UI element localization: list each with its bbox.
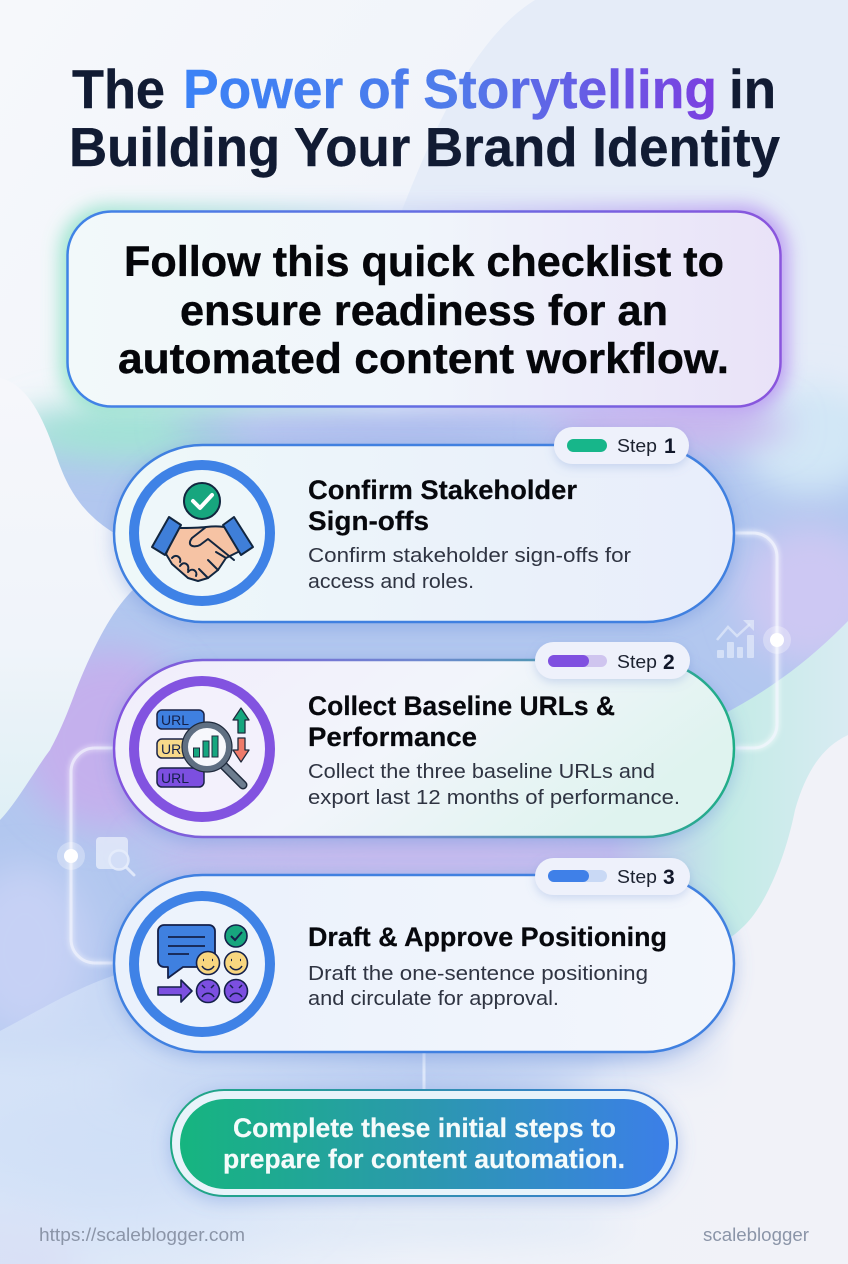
connector: step 3 to button	[422, 1053, 426, 1090]
call to action button: prepare for content automation.	[223, 1144, 625, 1174]
badge: step 2: 2	[663, 651, 675, 674]
call to action button	[171, 1090, 677, 1196]
badge: step 2: Step	[617, 651, 657, 672]
icon ring: url performance: URL	[161, 770, 189, 786]
title: in	[729, 58, 776, 120]
icon ring: feedback	[134, 896, 270, 1032]
heading: step 2: Performance	[308, 722, 477, 752]
heading: step 2	[308, 691, 615, 752]
text: step 3: and circulate for approval.	[308, 987, 559, 1010]
callout: checklist intro: Follow this quick checklist to	[124, 239, 724, 286]
connector: step 2 to step 3	[57, 748, 113, 963]
icon ring: handshake	[134, 465, 270, 601]
text: step 1: Confirm stakeholder sign-offs for	[308, 544, 631, 567]
text: step 1: access and roles.	[308, 570, 474, 593]
badge: step 2	[535, 642, 690, 679]
title: The	[72, 58, 165, 120]
panel: step 1	[114, 427, 734, 622]
callout: checklist intro: automated content workflow.	[118, 336, 729, 383]
callout: checklist intro	[60, 205, 788, 413]
heading: step 1: Sign-offs	[308, 506, 429, 536]
text: step 2	[308, 760, 680, 809]
callout: checklist intro: ensure readiness for an	[180, 288, 668, 335]
badge: step 1	[554, 427, 689, 464]
badge: step 3: Step	[617, 866, 657, 887]
icon: growth chart	[717, 620, 754, 658]
badge: step 1: Step	[617, 435, 657, 456]
heading: step 1	[308, 475, 577, 536]
text: step 1	[308, 544, 631, 593]
icon ring: url performance	[134, 681, 270, 817]
footer: brand: scaleblogger	[703, 1225, 809, 1245]
text: step 3: Draft the one-sentence positioning	[308, 962, 648, 985]
icon ring: url performance: URL	[161, 712, 189, 728]
panel: step 3	[114, 858, 734, 1052]
icon: search document	[96, 837, 134, 875]
call to action button: Complete these initial steps to	[233, 1113, 616, 1143]
title: Building Your Brand Identity	[69, 116, 780, 178]
text: step 3	[308, 962, 648, 1010]
badge: step 3	[535, 858, 690, 895]
heading: step 2: Collect Baseline URLs &	[308, 691, 615, 721]
text: step 2: export last 12 months of performance.	[308, 786, 680, 809]
title: Power of Storytelling	[183, 58, 717, 120]
title	[69, 58, 780, 178]
badge: step 1: 1	[664, 435, 676, 458]
panel: step 2	[114, 642, 734, 837]
badge: step 3: 3	[663, 866, 675, 889]
connector: step 1 to step 2	[735, 533, 791, 748]
heading: step 1: Confirm Stakeholder	[308, 475, 577, 505]
text: step 2: Collect the three baseline URLs and	[308, 760, 655, 783]
footer: url: https://scaleblogger.com	[39, 1225, 245, 1245]
icon ring: url performance: UR	[161, 741, 181, 757]
heading: step 3: Draft & Approve Positioning	[308, 922, 667, 952]
